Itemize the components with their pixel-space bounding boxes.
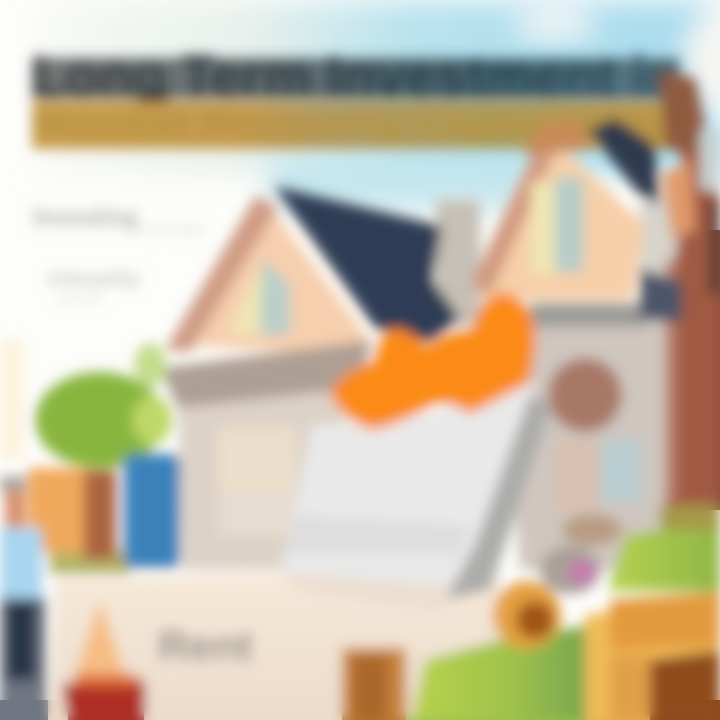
title banner <box>32 44 700 205</box>
coin stacks <box>585 592 720 720</box>
ball coin <box>493 581 561 649</box>
right gable <box>436 125 660 325</box>
eaves <box>160 340 372 408</box>
left text block: Investing <box>33 202 138 232</box>
tree <box>35 343 172 468</box>
person <box>0 476 46 720</box>
grass lower <box>412 625 590 720</box>
title line one: Long Term Investment in <box>32 44 680 109</box>
left haze <box>0 340 24 460</box>
title line two highlight: Rental Property Ownership <box>36 103 676 147</box>
right house wall <box>500 268 682 570</box>
sky <box>40 0 720 210</box>
bottom edge colours <box>0 700 720 720</box>
left text block: steady <box>46 268 142 290</box>
path label: Rent <box>158 622 253 669</box>
chimney <box>660 75 720 520</box>
orange burst <box>330 292 535 430</box>
purple flower <box>540 546 600 594</box>
roof overlap on banner <box>525 120 590 155</box>
left text block: real estate <box>140 221 205 237</box>
left house wall <box>178 385 345 570</box>
grass right <box>608 505 720 592</box>
left text block <box>33 202 205 305</box>
blue bin <box>124 454 180 568</box>
left gable <box>165 195 368 355</box>
planter base <box>50 550 130 574</box>
document sheet <box>280 382 537 612</box>
ladder <box>445 395 552 600</box>
cone <box>72 600 128 684</box>
orange crate <box>28 468 88 552</box>
left text block: growth <box>58 289 103 305</box>
ground path <box>52 572 500 720</box>
house backing <box>640 200 680 330</box>
right edge colours <box>706 230 720 510</box>
dark roof <box>274 186 460 342</box>
wooden post <box>342 648 406 720</box>
brown post <box>84 470 116 560</box>
red pot <box>62 674 145 720</box>
